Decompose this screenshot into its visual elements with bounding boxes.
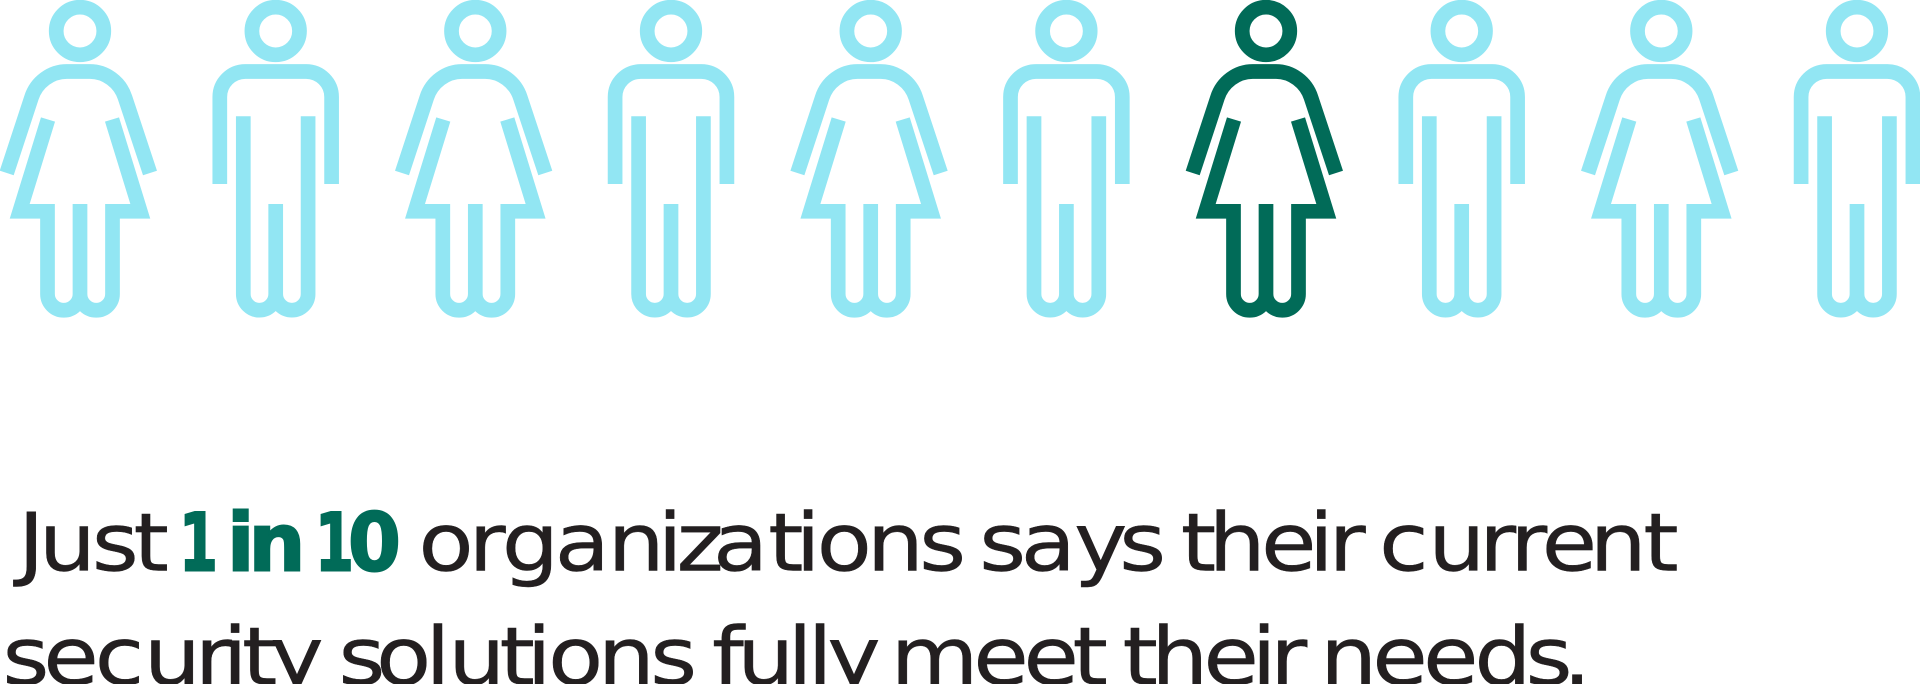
text line 1: current: [1379, 497, 1679, 590]
text line 1: [13, 496, 1679, 590]
icon: female person 3: [402, 7, 545, 310]
icon: female person 1: [7, 7, 150, 310]
highlighted statistic: 1 in 10: 1: [315, 498, 354, 590]
icon: female person 5: [797, 7, 941, 310]
text line 1: their: [1181, 497, 1367, 590]
icon: male person 6: [1010, 7, 1122, 310]
text line 2: [2, 611, 1592, 684]
text line 1: says: [979, 497, 1166, 590]
highlighted statistic: 1 in 10: 1: [179, 498, 218, 590]
icon: female person 9: [1588, 7, 1731, 310]
icon: male person 2: [220, 7, 332, 310]
text line 1: Just: [13, 497, 169, 590]
highlighted statistic: 1 in 10: in: [227, 496, 305, 590]
highlighted statistic: 1 in 10: [179, 496, 401, 590]
icon: male person 10: [1801, 7, 1913, 310]
icon: male person 8: [1406, 7, 1518, 310]
text line 1: organizations: [418, 497, 966, 590]
icon: highlighted female person 7: [1193, 7, 1336, 310]
icon: male person 4: [615, 7, 727, 310]
highlighted statistic: 1 in 10: 0: [348, 498, 401, 590]
pictogram row: ten people: [7, 7, 1913, 310]
statement text: [2, 496, 1679, 684]
